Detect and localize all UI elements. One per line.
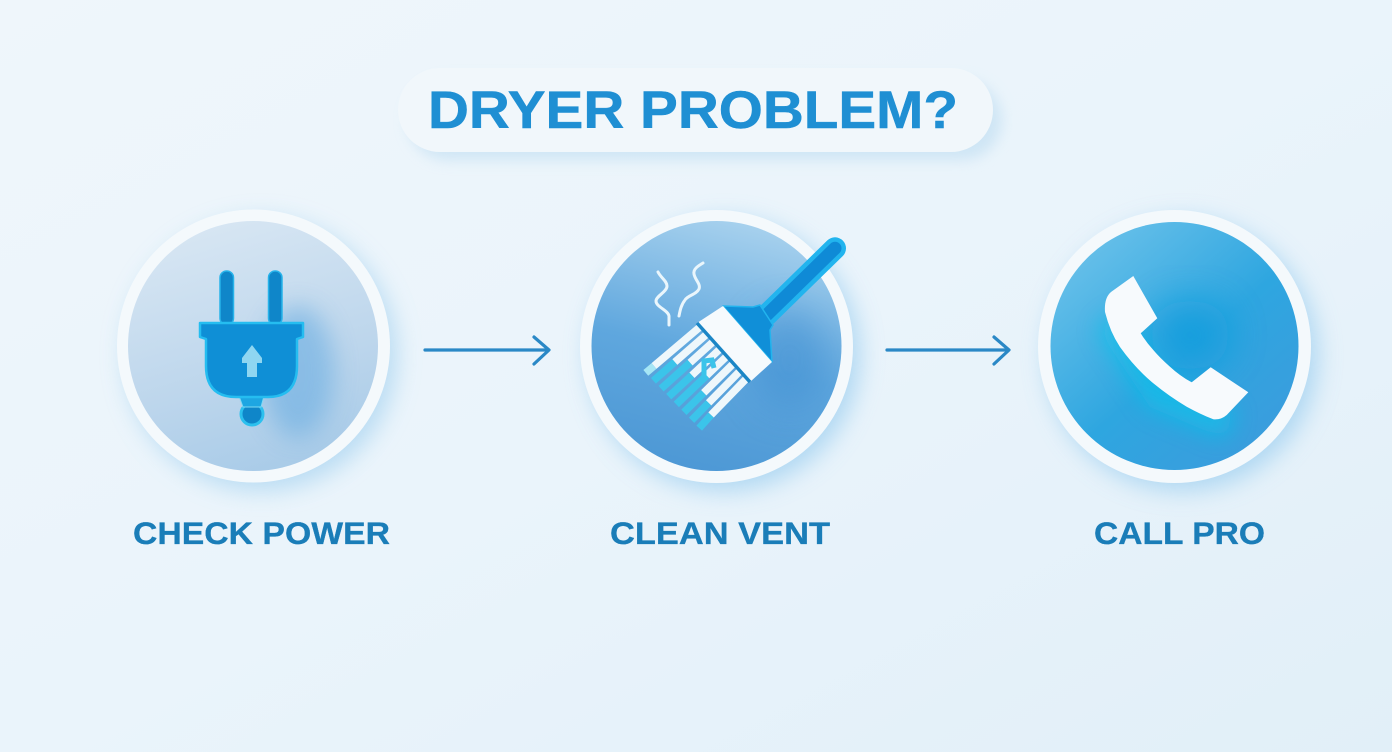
icon: plug	[200, 271, 303, 425]
step 3: call pro	[1038, 210, 1318, 491]
icon: phone handset	[1105, 276, 1248, 419]
brush ferrule	[723, 305, 773, 362]
arrow 2	[887, 337, 1009, 364]
title pill	[398, 68, 1002, 160]
label: clean vent: CLEAN VENT	[610, 515, 830, 551]
brush band	[697, 306, 772, 382]
step 1: check power	[117, 210, 397, 491]
brush bristles	[646, 327, 747, 428]
step 2: clean vent	[580, 210, 860, 491]
icon: brush	[646, 248, 835, 428]
title: DRYER PROBLEM?	[428, 81, 958, 140]
arrow 1	[425, 337, 549, 364]
icon: odor wisps	[656, 263, 703, 325]
label: call pro: CALL PRO	[1094, 515, 1265, 551]
label: check power: CHECK POWER	[133, 515, 390, 551]
